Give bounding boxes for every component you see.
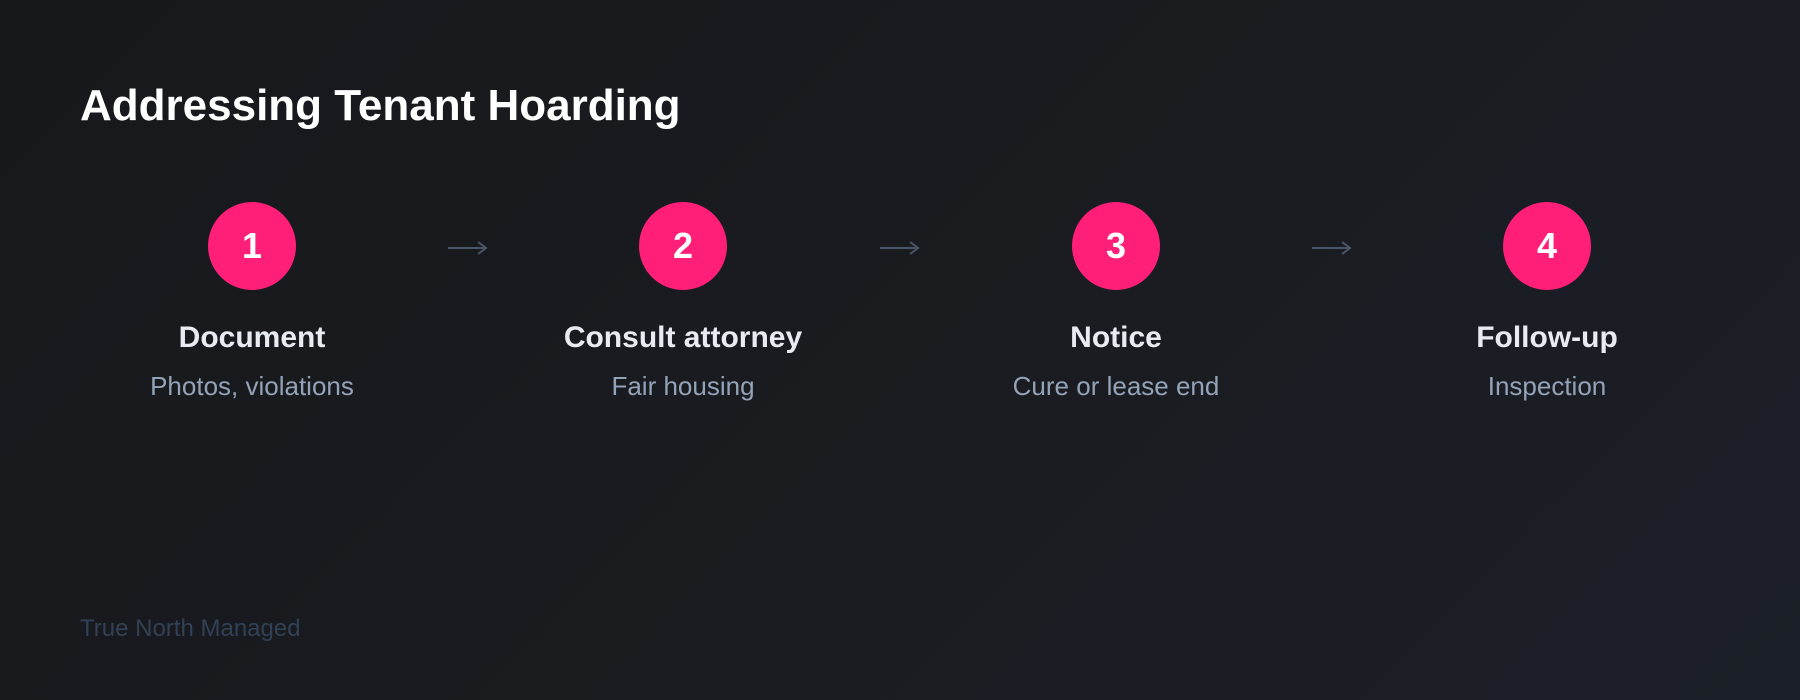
step 1: Document (179, 321, 325, 354)
step 3 (1013, 202, 1219, 401)
step 3: 3 (1106, 225, 1126, 266)
step 2 (564, 202, 802, 401)
step 2: Consult attorney (564, 321, 802, 354)
step 4: Follow-up (1476, 321, 1618, 354)
step 2: 2 (673, 225, 693, 266)
step 2: Fair housing (611, 371, 755, 401)
step 1 (150, 202, 354, 401)
step 4: 4 (1537, 225, 1557, 266)
step 4: Inspection (1488, 371, 1606, 401)
title: Addressing Tenant Hoarding (80, 81, 681, 130)
step 4 (1476, 202, 1618, 401)
step 3: Cure or lease end (1013, 371, 1219, 401)
step 1: Photos, violations (150, 371, 354, 401)
step 1: 1 (242, 225, 262, 266)
step 3: Notice (1070, 321, 1162, 354)
footer: True North Managed (80, 615, 301, 642)
arrow 3 (1312, 241, 1352, 255)
arrow 2 (880, 241, 920, 255)
arrow 1 (448, 241, 488, 255)
